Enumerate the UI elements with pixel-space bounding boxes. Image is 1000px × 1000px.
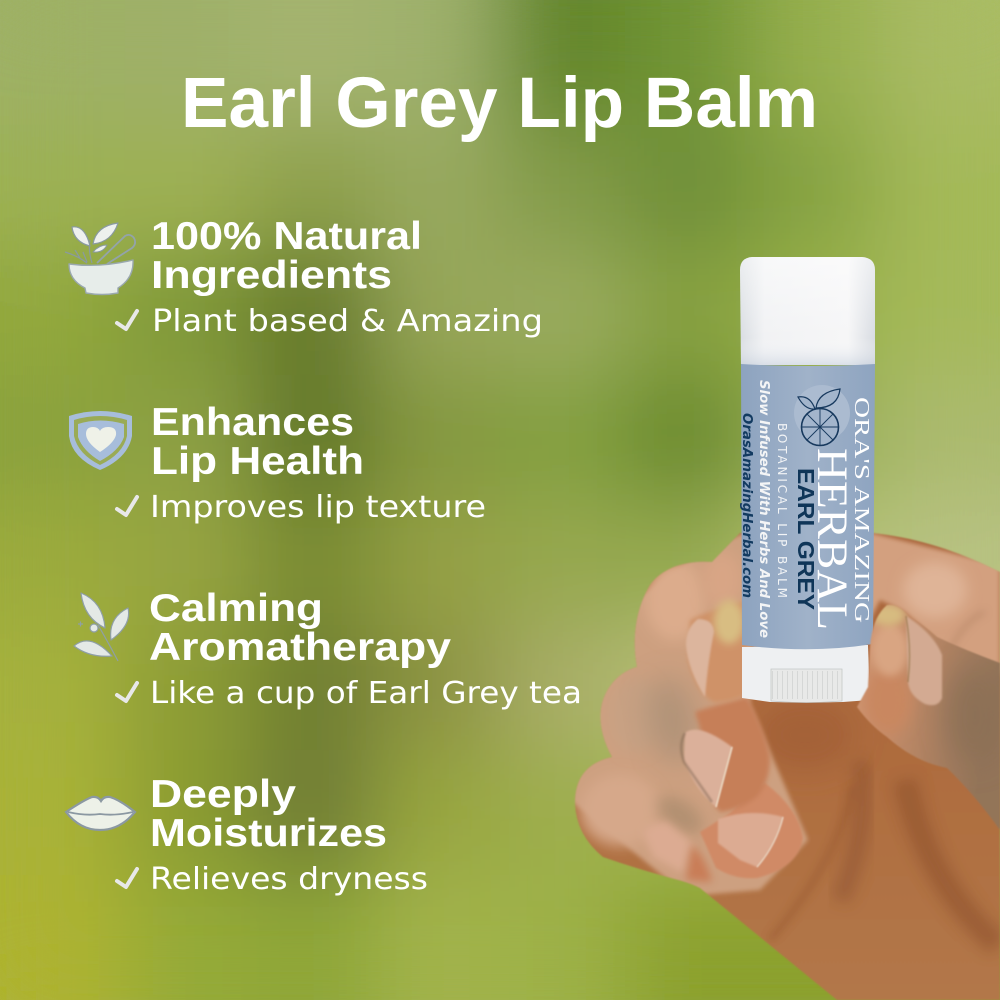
ring nail: [718, 813, 783, 867]
hand: thumb: [850, 600, 1000, 835]
benefit: enhances lip health: [69, 401, 486, 525]
sub text: Improves lip texture: [150, 490, 486, 525]
label: [741, 364, 875, 649]
label text: OrasAmazingHerbal.com: [739, 413, 754, 598]
lip balm tube: [739, 257, 875, 702]
sub text: Relieves dryness: [150, 862, 428, 897]
title: Earl Grey Lip Balm: [181, 64, 818, 143]
sub text: Like a cup of Earl Grey tea: [150, 676, 582, 711]
benefit: 100% natural ingredients: [65, 215, 543, 339]
heading: Moisturizes: [150, 812, 387, 855]
cap: [740, 257, 875, 365]
check mark: [117, 683, 137, 701]
pinky nail: [646, 821, 690, 870]
index nail: [686, 619, 714, 697]
heading: [149, 587, 451, 669]
icon: shield with heart: [69, 411, 132, 470]
label text: HERBAL: [808, 448, 855, 630]
shaded fingers base: [570, 530, 808, 895]
heading: Enhances: [151, 401, 354, 444]
palm shading: [772, 811, 846, 938]
heading: [151, 215, 422, 297]
benefit: calming aromatherapy: [74, 587, 582, 711]
heading: Aromatherapy: [149, 626, 451, 669]
sub text: Plant based & Amazing: [152, 304, 543, 339]
thumb nail: [906, 616, 942, 705]
heading: Deeply: [150, 773, 296, 816]
base: [742, 645, 870, 702]
label text: BOTANICAL LIP BALM: [775, 423, 789, 598]
middle nail: [684, 730, 732, 807]
check mark: [117, 311, 137, 329]
icon: herb sprig: [74, 593, 129, 661]
middle fingertip: [695, 697, 770, 812]
label text: [739, 380, 874, 638]
heading: [151, 401, 364, 483]
hand: palm and fingers: [570, 530, 1000, 1000]
label text: Slow Infused With Herbs And Love: [756, 380, 772, 638]
icon: lips: [66, 797, 135, 830]
icon: mortar and pestle with herbs: [65, 223, 135, 294]
back finger: [873, 532, 1000, 672]
heading: [150, 773, 387, 855]
check mark: [117, 869, 137, 887]
heading: Lip Health: [151, 440, 364, 483]
logo: [794, 385, 850, 446]
twist dial: [771, 669, 842, 702]
heading: Calming: [149, 587, 323, 630]
label text: EARL GREY: [793, 468, 819, 610]
check mark: [117, 497, 137, 515]
heading: 100% Natural: [151, 215, 422, 258]
ring fingertip: [700, 783, 803, 878]
benefit: deeply moisturizes: [66, 773, 428, 897]
index fingertip: [688, 600, 750, 702]
heading: Ingredients: [151, 254, 392, 297]
label text: ORA'S AMAZING: [850, 397, 874, 623]
